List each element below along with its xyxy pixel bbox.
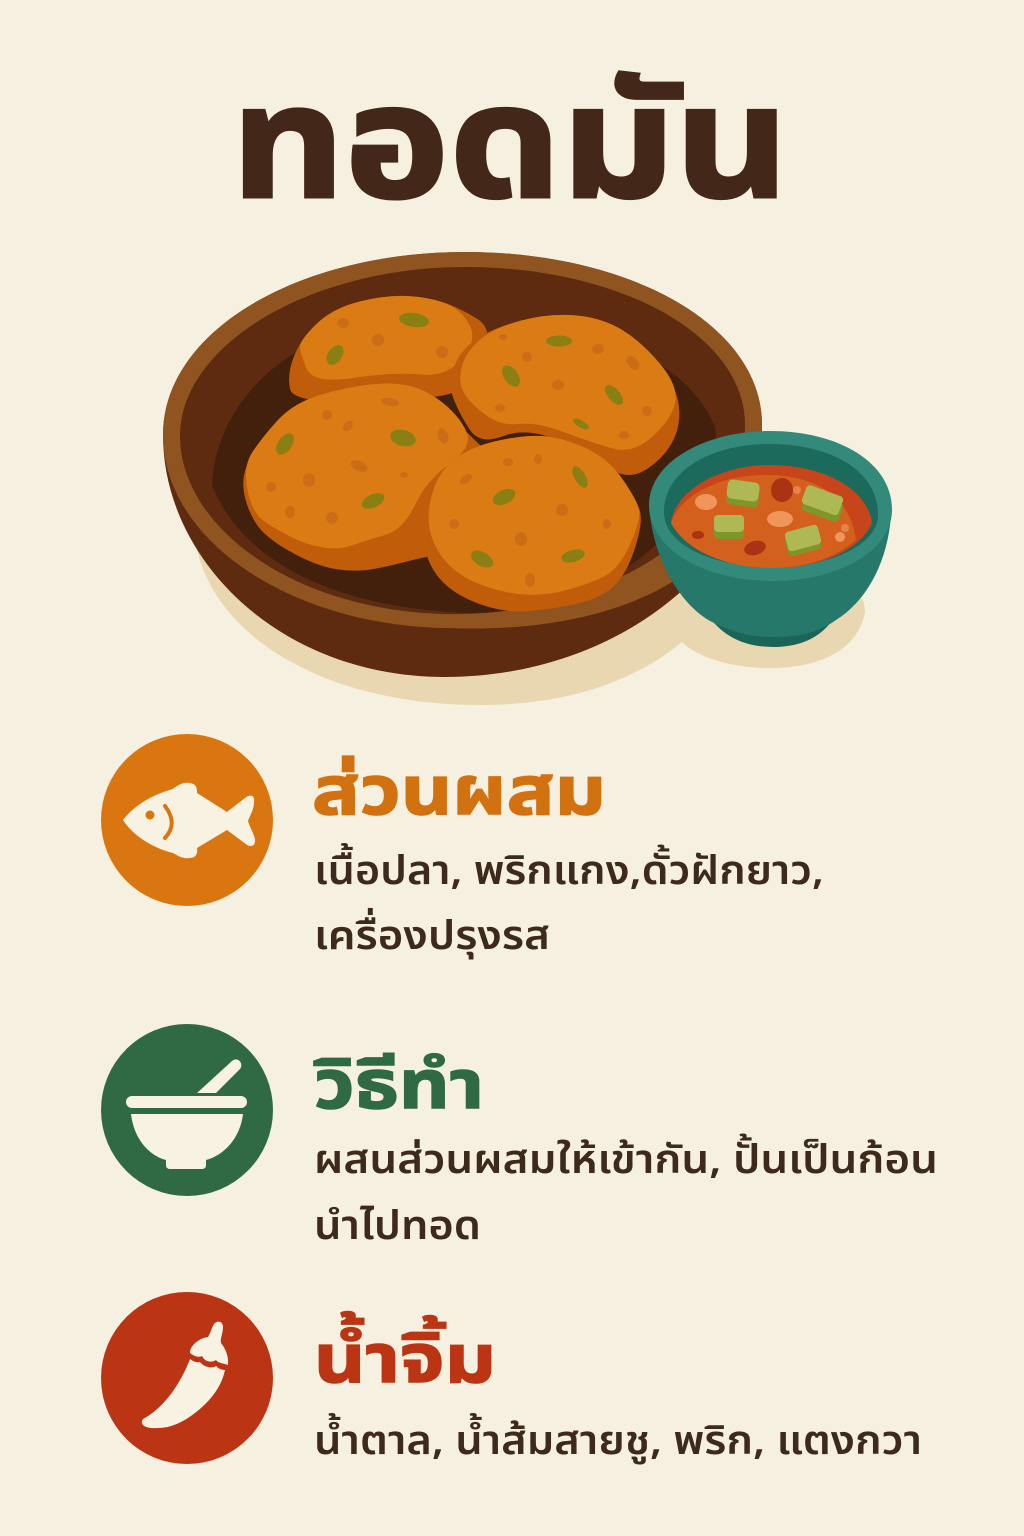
illustration: tod man plate with dipping sauce bbox=[163, 252, 892, 705]
patty: front left bbox=[243, 384, 482, 571]
section: method bbox=[101, 1024, 938, 1257]
icon: chili bbox=[101, 1292, 273, 1464]
text: นำไปทอด bbox=[314, 1197, 481, 1257]
heading: น้ำจิ้ม bbox=[314, 1310, 496, 1413]
heading: วิธีทำ bbox=[313, 1036, 484, 1139]
text: น้ำตาล, น้ำส้มสายชู, พริก, แตงกวา bbox=[314, 1412, 922, 1472]
patty: front right bbox=[423, 436, 641, 612]
patty: back left bbox=[289, 296, 488, 402]
bowl bbox=[649, 431, 892, 647]
title: ทอดมัน bbox=[231, 30, 789, 269]
plate bbox=[163, 252, 762, 677]
text: ผสนส่วนผสมให้เข้ากัน, ปั้นเป็นก้อน bbox=[314, 1131, 938, 1191]
icon: fish bbox=[101, 734, 273, 906]
icon: mortar bbox=[101, 1024, 273, 1196]
section: dipping sauce bbox=[101, 1292, 922, 1472]
text: เครื่องปรุงรส bbox=[314, 907, 550, 967]
heading: ส่วนผสม bbox=[312, 742, 606, 845]
plate shadow bbox=[196, 500, 865, 705]
text: เนื้อปลา, พริกแกง,ดั้วฝักยาว, bbox=[314, 842, 824, 902]
section: ingredients bbox=[101, 734, 824, 967]
patty: back right bbox=[451, 315, 679, 475]
